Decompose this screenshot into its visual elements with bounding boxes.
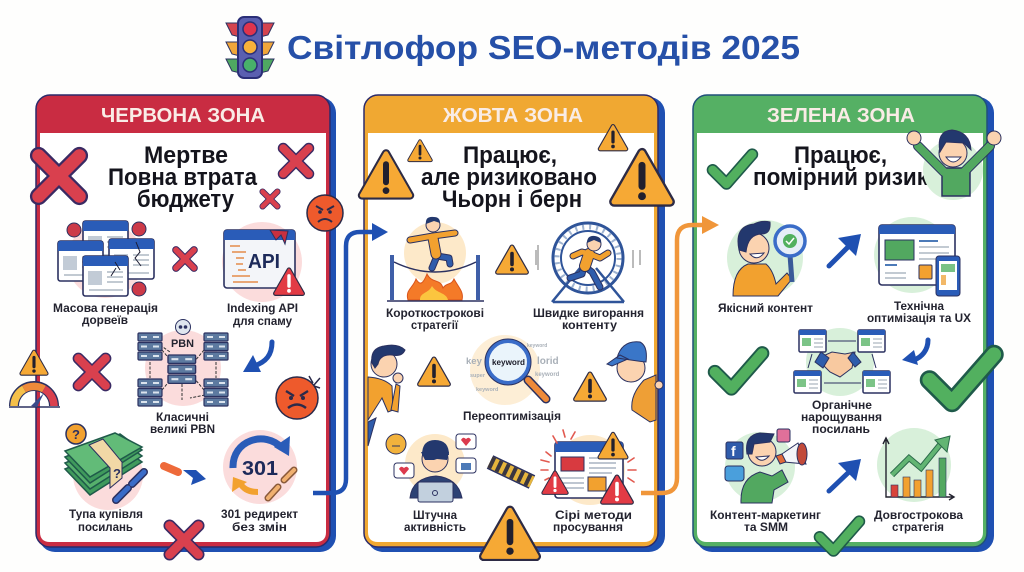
icon: tightrope over fire: [387, 217, 484, 301]
icon: keyword magnifier: super: [470, 373, 486, 379]
label: Тупа купівля: [69, 509, 143, 521]
label: Технічна: [894, 301, 945, 313]
label: стратегія: [892, 522, 944, 534]
title: [226, 17, 800, 78]
label: [227, 303, 298, 328]
icon: large cross: [39, 156, 79, 196]
icon: small warning: [409, 141, 431, 160]
icon: large warning: [362, 153, 410, 195]
label: [710, 510, 821, 534]
icon: cash stack: ?: [113, 466, 121, 481]
label: [867, 301, 971, 325]
icon: hamster wheel: [536, 223, 640, 302]
panel heading: ЖОВТА ЗОНА: [442, 105, 583, 127]
headline: Працює,: [463, 142, 557, 169]
character: excited person: [907, 130, 1001, 200]
label: посилань: [812, 424, 870, 436]
label: Сірі методи: [555, 510, 632, 522]
icon: cash stack: [65, 424, 144, 510]
label: [404, 510, 466, 534]
icon: technical UX browser: [874, 217, 960, 296]
arrow: curved blue: [902, 340, 928, 365]
label: контенту: [562, 320, 618, 332]
icon: PBN servers: [138, 320, 228, 406]
label: Якісний контент: [718, 303, 813, 315]
label: Indexing API: [227, 303, 298, 315]
headline: Працює,: [794, 142, 887, 169]
icon: angry face with burst: [276, 376, 320, 419]
arrow: cash to redirect: [164, 466, 206, 485]
label: Короткострокові: [386, 308, 484, 320]
icon: cross: [78, 358, 106, 386]
label: 301 редирект: [221, 509, 298, 521]
headline: [108, 142, 258, 213]
label: просування: [553, 522, 623, 534]
panel: red zone: [36, 95, 336, 552]
arrow: diagonal blue: [829, 234, 861, 266]
icon: cash stack: ?: [72, 427, 80, 442]
icon: Indexing API: API: [248, 251, 280, 273]
panel heading: ЗЕЛЕНА ЗОНА: [767, 105, 915, 127]
label: [386, 308, 484, 332]
label: дорвеїв: [82, 315, 128, 327]
label: [69, 509, 143, 534]
headline: [753, 142, 929, 191]
label: для спаму: [233, 316, 293, 328]
icon: traffic light: [226, 17, 274, 78]
chart: long-term growth: [877, 428, 954, 502]
heading text: Світлофор SEO-методів 2025: [287, 29, 800, 66]
icon: keyword magnifier: key: [466, 356, 483, 367]
icon: warning: [420, 359, 448, 384]
icon: 301 redirect: [223, 430, 297, 504]
label: [533, 308, 644, 332]
label: Довгострокова: [874, 510, 964, 522]
icon: warning: [498, 247, 526, 272]
character: cap right: [607, 342, 663, 422]
icon: keyword magnifier: keyword: [492, 357, 525, 367]
icon: large warning: [614, 153, 670, 202]
icon: keyword magnifier: keyword: [535, 372, 560, 378]
icon: Indexing API: [222, 222, 303, 302]
label: без змін: [232, 522, 287, 534]
label: [553, 510, 632, 534]
panel: yellow zone: [364, 95, 665, 552]
character: worried left: [368, 345, 405, 446]
label: [150, 412, 215, 436]
icon: cross: [176, 250, 194, 268]
icon: caution tape: [490, 462, 532, 482]
icon: warning: [600, 126, 626, 149]
headline: Чьорн і берн: [442, 186, 582, 213]
label: Класичні: [156, 412, 209, 424]
label: та SMM: [744, 522, 788, 534]
panel: green zone: [693, 95, 994, 552]
icon: organic link building: [794, 328, 890, 396]
icon: small cross: [263, 192, 277, 206]
headline: [421, 142, 597, 213]
label: Органічне: [812, 400, 872, 412]
icon: quality content person: [727, 220, 805, 296]
label: [801, 400, 882, 436]
icon: bottom warning: [484, 510, 536, 556]
label: Контент-маркетинг: [710, 510, 821, 522]
headline: помірний ризик: [753, 164, 929, 191]
icon: angry face: [307, 195, 343, 231]
label: [874, 510, 964, 534]
arrow: diagonal blue: [829, 459, 861, 491]
headline: бюджету: [137, 186, 235, 213]
icon: grey methods browser: [541, 430, 636, 505]
headline: але ризиковано: [421, 164, 597, 191]
icon: warning: [22, 352, 46, 374]
icon: PBN servers: PBN: [171, 338, 194, 350]
label: стратегії: [411, 320, 459, 332]
label: нарощування: [801, 412, 882, 424]
label: посилань: [78, 522, 133, 534]
icon: keyword magnifier: keyword: [476, 387, 498, 393]
icon: keyword magnifier: keyword: [527, 343, 547, 349]
icon: bottom cross: [170, 526, 198, 554]
icon: masked fake activity: [386, 434, 476, 502]
icon: gauge: [9, 386, 60, 407]
icon: mass doorway pages: [58, 221, 154, 298]
icon: check: [715, 353, 762, 388]
icon: keyword magnifier: [466, 335, 560, 405]
arrow: curved blue: [243, 342, 272, 372]
label: оптимізація та UX: [867, 313, 971, 325]
label: [221, 509, 298, 534]
headline: Повна втрата: [108, 164, 258, 191]
icon: content marketing person: f: [731, 443, 736, 459]
icon: cross: [283, 148, 309, 174]
icon: large check: [930, 354, 994, 402]
icon: warning: [576, 374, 604, 399]
label: активність: [404, 522, 466, 534]
headline: Мертве: [144, 142, 228, 169]
label: Переоптимізація: [463, 411, 561, 423]
label: Швидке вигорання: [533, 308, 644, 320]
connector arrow: yellow to green: [641, 216, 719, 493]
icon: content marketing person: [725, 429, 807, 503]
label: Штучна: [413, 510, 458, 522]
icon: 301 redirect: 301: [242, 458, 278, 480]
connector arrow: red to yellow: [313, 223, 388, 493]
label: [53, 303, 158, 327]
label: великі PBN: [150, 424, 215, 436]
panel heading: ЧЕРВОНА ЗОНА: [101, 105, 265, 127]
icon: check: [713, 154, 752, 184]
label: Масова генерація: [53, 303, 158, 315]
icon: keyword magnifier: lorid: [537, 356, 559, 367]
icon: bottom check: [820, 521, 859, 551]
